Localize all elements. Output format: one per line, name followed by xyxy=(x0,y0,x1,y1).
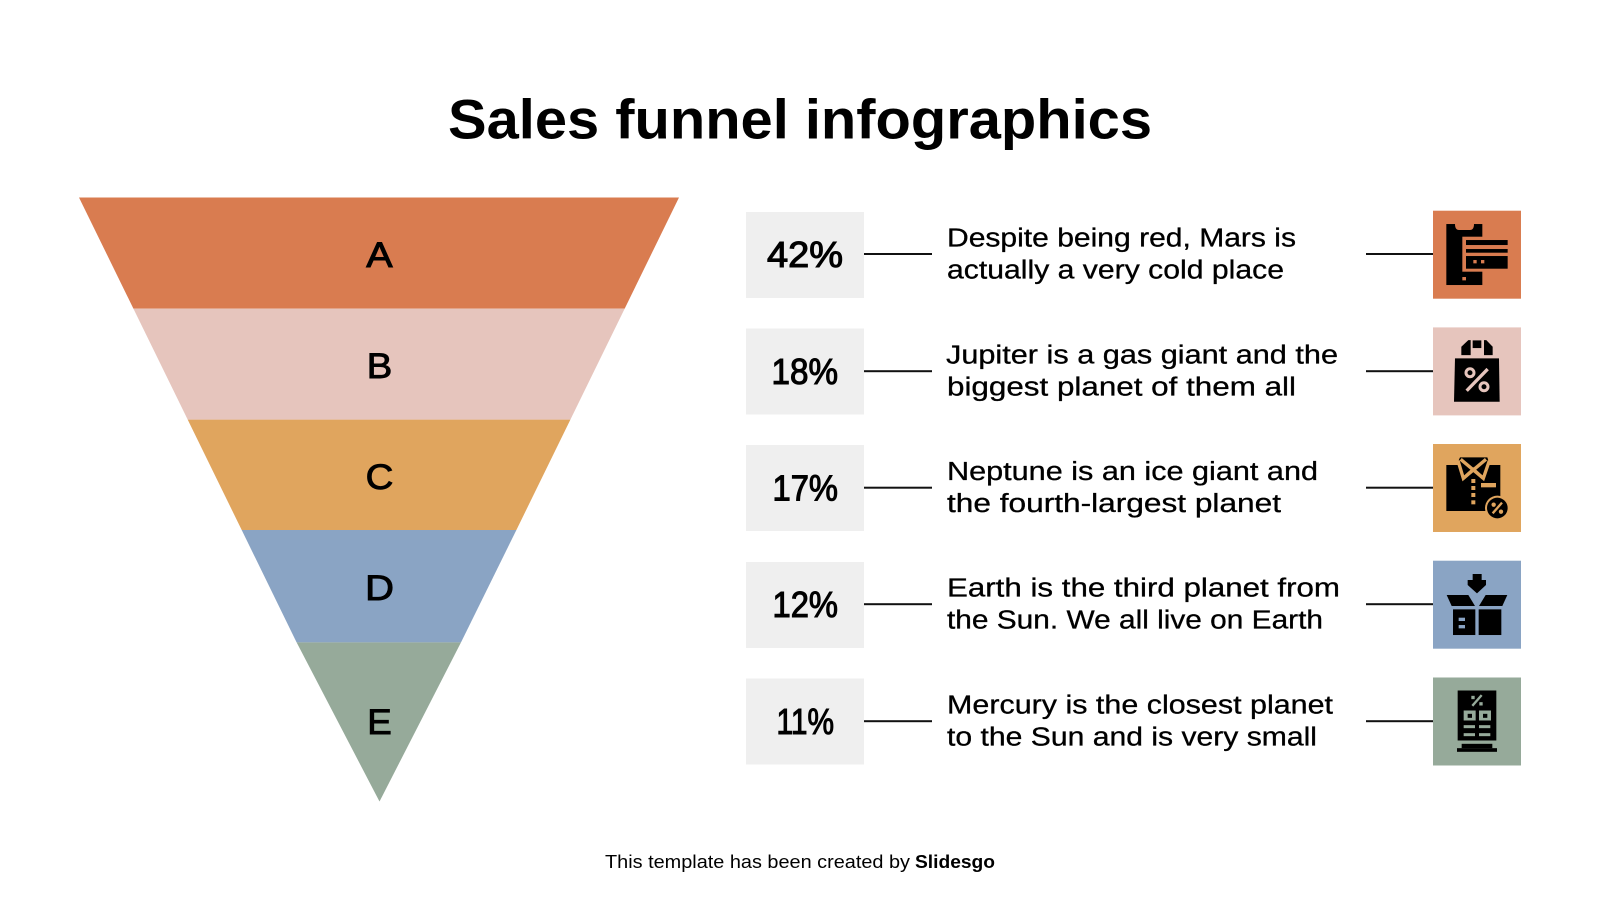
footer credit: This template has been created by xyxy=(605,852,910,872)
percentage box 18% xyxy=(746,328,864,414)
description: Mercury is the closest planet xyxy=(947,692,1333,720)
percentage box 17%: 17% xyxy=(772,468,838,508)
description: to the Sun and is very small xyxy=(947,723,1317,751)
description: Earth is the third planet from xyxy=(947,575,1340,603)
funnel segment C xyxy=(188,420,570,530)
description xyxy=(947,458,1318,518)
description: Neptune is an ice giant and xyxy=(947,458,1318,486)
description: Jupiter is a gas giant and the xyxy=(946,342,1338,370)
description: actually a very cold place xyxy=(947,256,1284,284)
connector xyxy=(864,487,932,489)
connector xyxy=(864,253,932,255)
funnel segment D: D xyxy=(365,569,394,608)
icon: shirt with discount badge xyxy=(1433,444,1521,532)
description xyxy=(947,692,1333,751)
footer credit: Slidesgo xyxy=(915,852,995,872)
icon: shopping bag with percent xyxy=(1433,327,1521,415)
description: the fourth-largest planet xyxy=(947,490,1281,518)
percentage box 17% xyxy=(746,445,864,531)
description xyxy=(947,225,1296,284)
funnel segment E xyxy=(297,642,461,802)
row 2: Jupiter xyxy=(746,327,1521,415)
percentage box 11% xyxy=(746,678,864,764)
icon: phone with cards xyxy=(1433,211,1521,299)
funnel segment E: E xyxy=(367,703,392,742)
percentage box 18%: 18% xyxy=(772,351,838,392)
connector xyxy=(864,603,932,605)
funnel segment A xyxy=(79,198,679,309)
description: biggest planet of them all xyxy=(947,373,1296,401)
percentage box 12% xyxy=(746,562,864,648)
description: the Sun. We all live on Earth xyxy=(947,606,1323,634)
funnel chart xyxy=(79,198,679,802)
percentage box 11%: 11% xyxy=(776,701,834,742)
funnel segment A: A xyxy=(366,236,393,275)
connector xyxy=(1366,253,1433,255)
row 3: Neptune xyxy=(746,444,1521,532)
connector xyxy=(864,720,932,722)
percentage box 42%: 42% xyxy=(767,234,843,275)
row 1: Mars xyxy=(746,211,1521,299)
description: Despite being red, Mars is xyxy=(947,225,1296,253)
description xyxy=(946,342,1338,401)
description xyxy=(947,575,1340,634)
percentage box 42% xyxy=(746,212,864,298)
icon: open box with arrow xyxy=(1433,561,1521,649)
icon: sale display stand xyxy=(1433,678,1521,765)
connector xyxy=(1366,603,1433,605)
row 4: Earth xyxy=(746,561,1521,649)
connector xyxy=(1366,720,1433,722)
funnel segment B: B xyxy=(367,347,392,386)
funnel segment C: C xyxy=(366,458,393,497)
connector xyxy=(864,370,932,372)
connector xyxy=(1366,487,1433,489)
title: Sales funnel infographics xyxy=(448,88,1152,150)
percentage box 12%: 12% xyxy=(772,584,838,625)
funnel segment D xyxy=(242,530,516,642)
funnel segment B xyxy=(133,309,625,420)
row 5: Mercury xyxy=(746,678,1521,765)
connector xyxy=(1366,370,1433,372)
